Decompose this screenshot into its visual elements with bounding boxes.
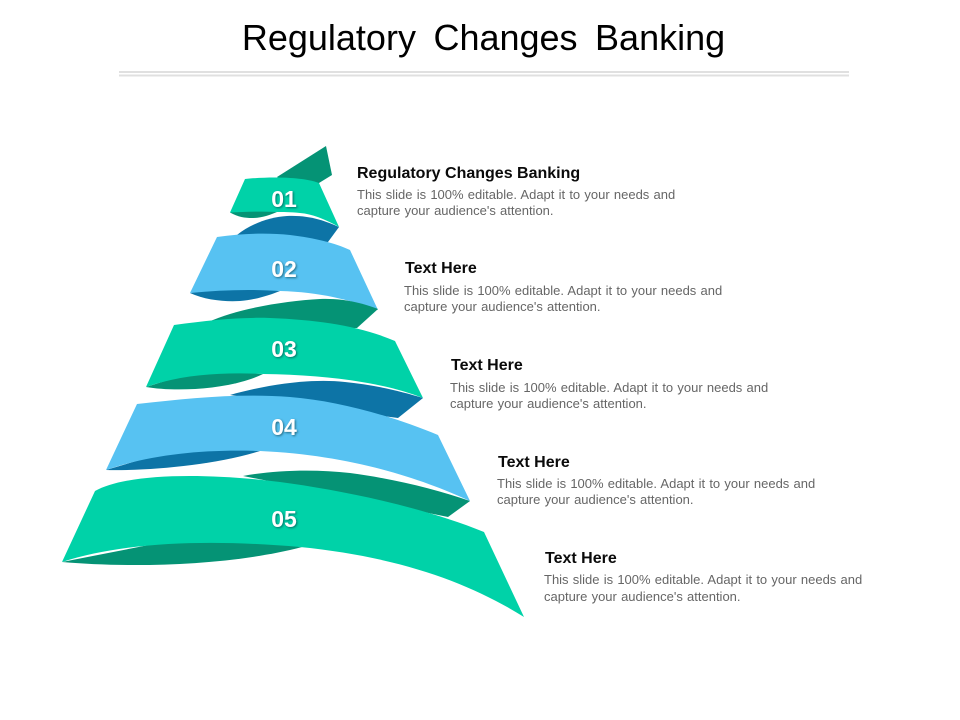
ribbon 02 <box>190 216 378 310</box>
number 05: 05 <box>271 506 297 532</box>
text block 02: capture your audience's attention. <box>404 299 601 314</box>
text block 04: Text Here <box>498 454 570 471</box>
number 02: 02 <box>271 256 297 282</box>
number 04: 04 <box>271 414 297 440</box>
text block 04 <box>497 454 815 507</box>
ribbon 01 <box>230 146 339 227</box>
text block 03: Text Here <box>451 357 523 374</box>
text block 05 <box>544 550 862 604</box>
text block 02: Text Here <box>405 260 477 277</box>
text block 05: This slide is 100% editable. Adapt it to your needs and <box>544 572 862 587</box>
text block 01: This slide is 100% editable. Adapt it to your needs and <box>357 187 675 202</box>
text block 02: This slide is 100% editable. Adapt it to your needs and <box>404 283 722 298</box>
text block 04: capture your audience's attention. <box>497 492 694 507</box>
title: Regulatory Changes Banking <box>242 17 725 58</box>
text block 02 <box>404 260 722 314</box>
text block 03: This slide is 100% editable. Adapt it to your needs and <box>450 380 768 395</box>
number 03: 03 <box>271 336 297 362</box>
ribbon 03 <box>146 299 423 398</box>
pyramid ribbon chart <box>62 146 524 617</box>
text block 04: This slide is 100% editable. Adapt it to your needs and <box>497 476 815 491</box>
text block 03 <box>450 357 768 411</box>
text block 01: capture your audience's attention. <box>357 203 554 218</box>
number 01: 01 <box>271 186 297 212</box>
text block 01 <box>357 165 675 218</box>
text block 05: capture your audience's attention. <box>544 589 741 604</box>
text block 03: capture your audience's attention. <box>450 396 647 411</box>
ribbon 04 <box>106 381 470 501</box>
text block 05: Text Here <box>545 550 617 567</box>
text block 01: Regulatory Changes Banking <box>357 165 580 182</box>
ribbon 05 <box>62 471 524 617</box>
